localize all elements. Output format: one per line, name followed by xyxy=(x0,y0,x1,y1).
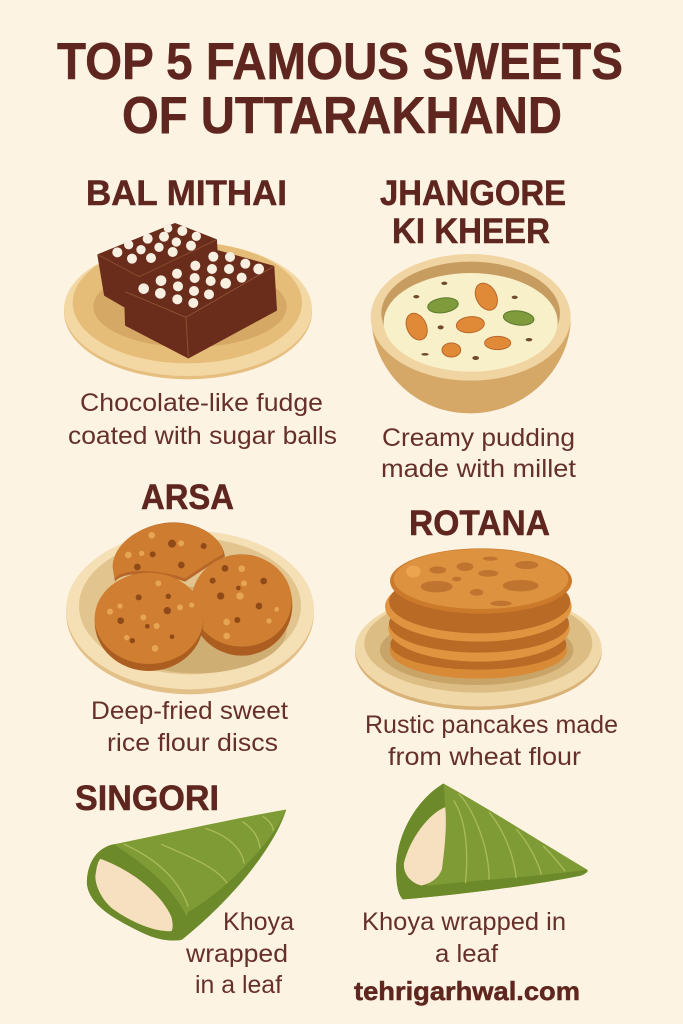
panel: singori left xyxy=(75,779,294,999)
description: singori left: Khoya xyxy=(223,908,294,936)
description: rotana: Rustic pancakes made xyxy=(365,711,618,739)
description: jhangore ki kheer: Creamy pudding xyxy=(382,424,575,452)
title: TOP 5 FAMOUS SWEETS xyxy=(57,33,623,91)
description: singori right: a leaf xyxy=(435,940,498,968)
description: arsa: rice flour discs xyxy=(107,729,278,757)
heading: bal mithai: BAL MITHAI xyxy=(86,174,287,213)
description: jhangore ki kheer xyxy=(381,424,576,483)
description: singori left xyxy=(185,908,294,999)
description: singori right: Khoya wrapped in xyxy=(362,908,566,936)
description: singori left: in a leaf xyxy=(195,971,282,999)
description: bal mithai: Chocolate-like fudge xyxy=(80,389,323,417)
panel: jhangore ki kheer xyxy=(371,174,576,483)
description: bal mithai: coated with sugar balls xyxy=(68,422,337,450)
description: arsa: Deep-fried sweet xyxy=(91,697,288,725)
icon: singori leaf cone right xyxy=(396,783,588,899)
panel: singori right xyxy=(362,783,588,968)
heading: singori: SINGORI xyxy=(75,779,219,818)
heading: arsa: ARSA xyxy=(141,478,234,517)
description: jhangore ki kheer: made with millet xyxy=(381,455,576,483)
description: rotana xyxy=(365,711,618,771)
heading: jhangore ki kheer: JHANGORE xyxy=(380,174,566,213)
heading: jhangore ki kheer xyxy=(380,174,566,251)
heading: jhangore ki kheer: KI KHEER xyxy=(392,212,550,251)
panel: bal mithai xyxy=(64,174,337,450)
description: singori left: wrapped xyxy=(185,940,288,968)
title xyxy=(57,33,623,145)
description: rotana: from wheat flour xyxy=(388,743,581,771)
icon: bal mithai on plate xyxy=(64,224,312,379)
panel: rotana xyxy=(355,504,618,771)
icon: singori leaf cone left xyxy=(87,809,286,940)
title: OF UTTARAKHAND xyxy=(122,87,562,145)
description: arsa xyxy=(91,697,288,757)
icon: rotana stack on plate xyxy=(355,548,602,710)
panel: arsa xyxy=(66,478,314,757)
icon: kheer bowl xyxy=(371,254,571,413)
website credit: tehrigarhwal.com xyxy=(354,976,580,1006)
description: singori right xyxy=(362,908,566,968)
heading: rotana: ROTANA xyxy=(409,504,550,543)
description: bal mithai xyxy=(68,389,337,450)
icon: arsa on plate xyxy=(66,522,314,694)
